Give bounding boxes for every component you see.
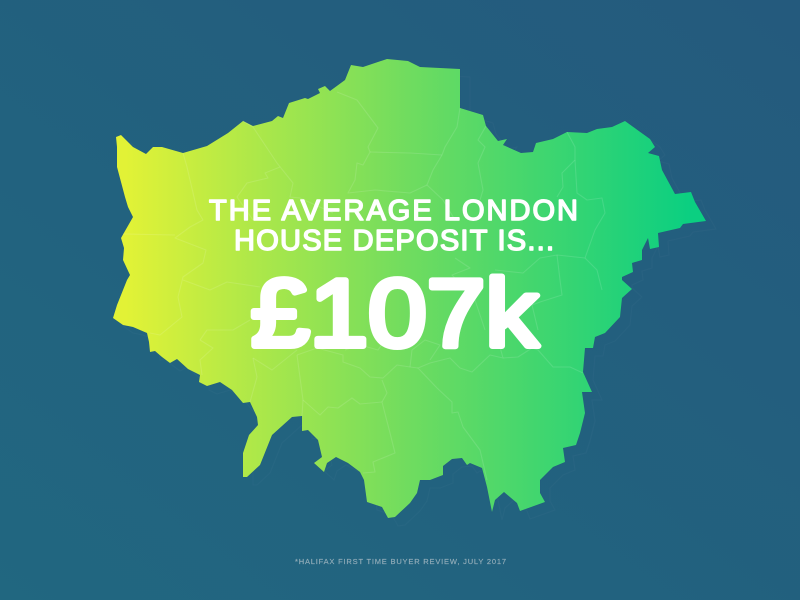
map fill <box>113 59 706 518</box>
map shadow outline <box>123 67 716 526</box>
heading line 2: HOUSE DEPOSIT IS... <box>234 225 554 257</box>
borough boundaries <box>123 92 605 480</box>
source footnote: *HALIFAX FIRST TIME BUYER REVIEW, JULY 2017 <box>295 557 506 566</box>
heading <box>209 195 578 257</box>
deposit figure: £107k <box>251 260 539 367</box>
map of London <box>113 59 706 518</box>
heading line 1: THE AVERAGE LONDON <box>209 195 578 227</box>
